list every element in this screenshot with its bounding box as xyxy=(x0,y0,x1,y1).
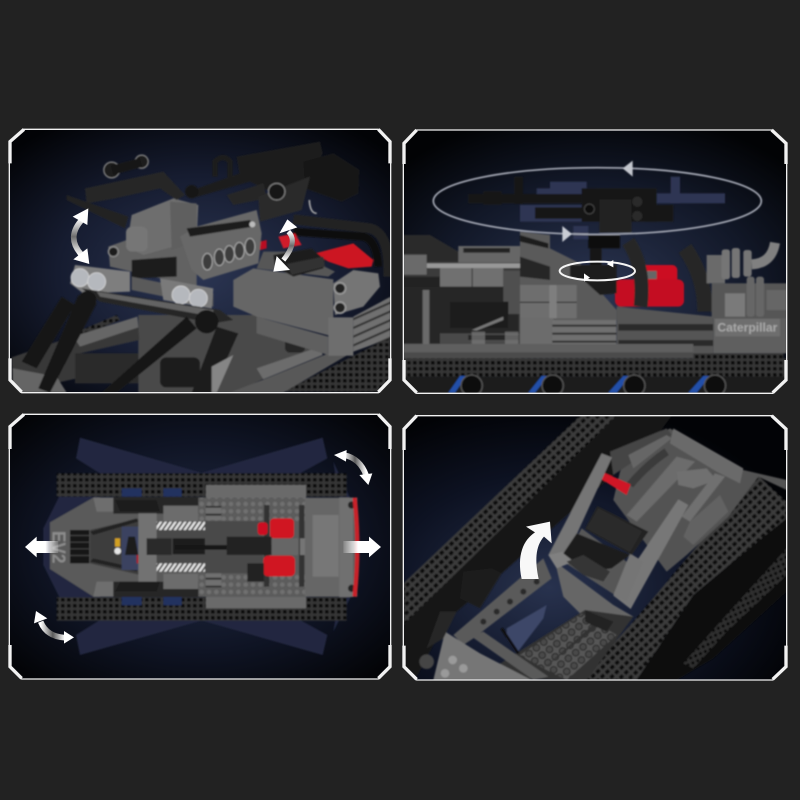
gun barrels xyxy=(175,545,272,550)
rear gun arm xyxy=(85,172,185,203)
red tank xyxy=(315,243,373,268)
rear hull xyxy=(613,428,787,572)
rear body xyxy=(616,305,714,354)
icon: small rotation ring xyxy=(560,260,635,282)
angled view of vehicle xyxy=(403,416,787,680)
front hull xyxy=(433,632,532,680)
panel frame xyxy=(403,130,787,393)
upper wheels band xyxy=(403,416,672,677)
lower right track xyxy=(580,475,787,680)
icon: upper track swing arrow xyxy=(334,450,372,485)
left gun cradle xyxy=(127,198,198,255)
top view of vehicle xyxy=(43,438,357,655)
wheels xyxy=(460,568,502,608)
icon: double arrow for gun elevation xyxy=(73,208,89,264)
deck plates xyxy=(627,457,695,522)
body left xyxy=(403,260,520,360)
light bars xyxy=(70,265,130,293)
body centre xyxy=(520,232,617,320)
gun mount xyxy=(588,235,620,248)
ghost tracks xyxy=(43,438,353,655)
infographic canvas xyxy=(8,128,788,681)
rod xyxy=(67,195,128,228)
cross bars xyxy=(264,505,269,587)
ghost gun xyxy=(520,177,725,239)
outer far track xyxy=(683,548,787,668)
panel: track spread detail xyxy=(9,414,391,679)
side view of vehicle with rotating gun xyxy=(403,161,787,396)
base strip xyxy=(404,343,694,353)
underside floor xyxy=(477,610,633,680)
brand plate: Caterpillar xyxy=(717,321,778,335)
icon: double arrow for front gun elevation xyxy=(273,219,297,272)
red tanks xyxy=(644,264,678,280)
rear deck xyxy=(305,498,340,597)
side beam xyxy=(453,558,552,645)
hatch block xyxy=(520,318,553,348)
vehicle close-up with guns and bipods xyxy=(12,142,391,393)
red connector xyxy=(601,472,631,495)
wheels xyxy=(448,376,710,393)
seat block xyxy=(273,248,325,277)
rear pipes xyxy=(293,219,388,277)
panel frame xyxy=(403,416,787,680)
panel frame xyxy=(9,129,391,393)
panel: opening hatch detail xyxy=(403,416,787,680)
raised side blocks xyxy=(206,485,306,498)
icon: forward arrow xyxy=(343,537,381,557)
panel: gun rotation detail xyxy=(403,130,787,396)
red tanks xyxy=(258,522,268,535)
centre spine xyxy=(138,513,157,582)
black gun xyxy=(468,177,673,222)
cockpit xyxy=(90,518,140,575)
front gun cradle xyxy=(180,210,262,280)
icon: lift arrow xyxy=(520,522,552,579)
louvres xyxy=(206,506,221,520)
black hoses xyxy=(628,242,642,307)
centre frames xyxy=(108,240,198,286)
tracks xyxy=(57,473,347,497)
upper left track xyxy=(403,416,623,625)
panel: gun elevation detail xyxy=(9,129,391,393)
EV2 marking: EV2 xyxy=(49,531,70,563)
lower wheels band xyxy=(637,518,787,680)
bipod legs xyxy=(22,297,75,368)
right block xyxy=(233,268,333,337)
hatch frame bars xyxy=(548,453,612,563)
track xyxy=(403,358,787,377)
hinged cylinders xyxy=(116,500,159,511)
seat xyxy=(585,506,648,555)
support column xyxy=(555,562,633,628)
icon: lower track swing arrow xyxy=(34,611,74,644)
rotation ring xyxy=(433,168,761,234)
hull xyxy=(50,498,357,597)
icon: backward arrow xyxy=(25,537,58,557)
hose xyxy=(630,452,667,485)
main gun xyxy=(196,174,250,198)
grille xyxy=(70,530,89,563)
panel frame xyxy=(9,414,391,679)
